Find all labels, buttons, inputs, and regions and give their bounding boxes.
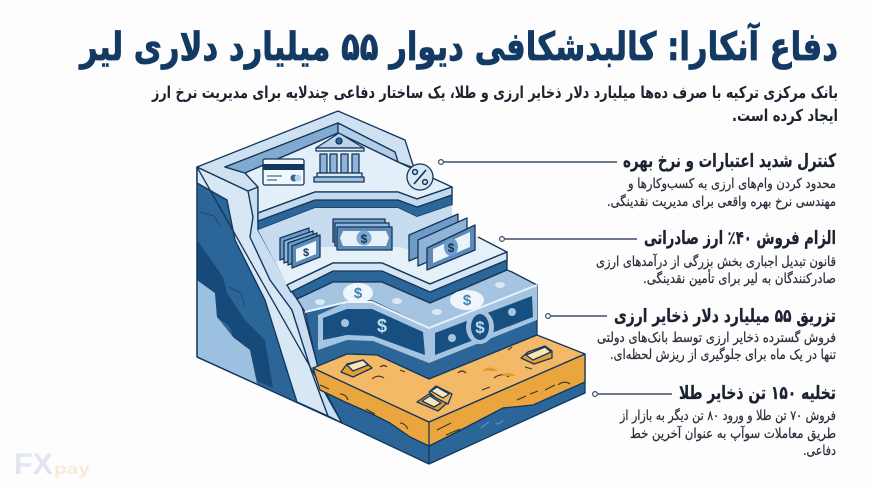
logo: FXpay watermark: [14, 448, 90, 481]
callout 3: dollar injection: تنها در یک ماه برای جلوگیری از ریزش لحظه‌ای.: [610, 346, 836, 363]
fourth step: gold reserves: [313, 335, 585, 464]
icon: fanned cash stack: [409, 214, 475, 270]
icon: central bank building: [314, 133, 364, 182]
icon: gold bar left: [341, 360, 372, 377]
intro text: ایجاد کرده است.: [732, 106, 838, 126]
connector 2: [500, 237, 637, 241]
callout 4: gold reserves: [593, 383, 836, 459]
third step: dollar reserves: [297, 270, 537, 379]
connector 3: [546, 314, 607, 318]
coins and dots on the step: $: [463, 292, 472, 309]
icon: gold bar stack centre: [417, 386, 452, 411]
left cliff wall: [197, 167, 342, 423]
icon: small cash stack: [280, 228, 320, 268]
second step front band: [287, 252, 507, 303]
connector 1: [439, 160, 617, 164]
logo: FXpay watermark: FX: [14, 448, 53, 481]
callout 2: export FX surrender: الزام فروش ۴۰٪ ارز صادراتی: [644, 228, 836, 249]
callout 1: credit control: [439, 151, 836, 210]
icon: percent badge: [407, 164, 433, 190]
icon: flat cash stack: $: [361, 232, 368, 246]
coins and dots on the step: $: [377, 316, 387, 336]
connector 4: [593, 392, 672, 396]
second step: banknote stacks: [258, 205, 507, 285]
callout 3: dollar injection: [546, 306, 836, 363]
callout 4: gold reserves: تخلیه ۱۵۰ تن ذخایر طلا: [679, 383, 836, 404]
callout 4: gold reserves: دفاعی.: [803, 443, 836, 459]
callout 4: gold reserves: فروش ۷۰ تن طلا و ورود ۸۰ تن دیگر به بازار از: [619, 407, 836, 424]
gold texture marks: [320, 347, 570, 435]
callout 2: export FX surrender: صادرکنندگان به لیر برای تأمین نقدینگی.: [643, 269, 836, 287]
intro text: [151, 83, 838, 126]
layered defence wall illustration: [197, 111, 585, 464]
callout 4: gold reserves: طریق معاملات سوآپ به عنوان آخرین خط: [630, 425, 836, 442]
logo: FXpay watermark: pay: [54, 461, 90, 478]
callout 1: credit control: محدود کردن وام‌های ارزی به کسب‌وکارها و: [627, 176, 836, 192]
icon: fanned cash stack: $: [448, 241, 455, 255]
callout 2: export FX surrender: [500, 228, 836, 287]
coins and dots on the step: $: [354, 285, 363, 302]
callout 1: credit control: مهندسی نرخ بهره واقعی برای مدیریت نقدینگی.: [607, 193, 836, 210]
icon: gold bar right: [521, 346, 552, 364]
coins and dots on the step: $: [475, 318, 485, 337]
coins and dots on the step: [315, 282, 516, 344]
callout 3: dollar injection: تزریق ۵۵ میلیارد دلار ذخایر ارزی: [614, 306, 836, 327]
top platform: rim, bank and card: [197, 111, 452, 230]
icon: credit card: [263, 159, 304, 185]
icon: flat cash stack: [333, 219, 392, 250]
icon: small cash stack: $: [303, 247, 309, 259]
callout 3: dollar injection: فروش گسترده ذخایر ارزی توسط بانک‌های دولتی: [597, 329, 836, 346]
